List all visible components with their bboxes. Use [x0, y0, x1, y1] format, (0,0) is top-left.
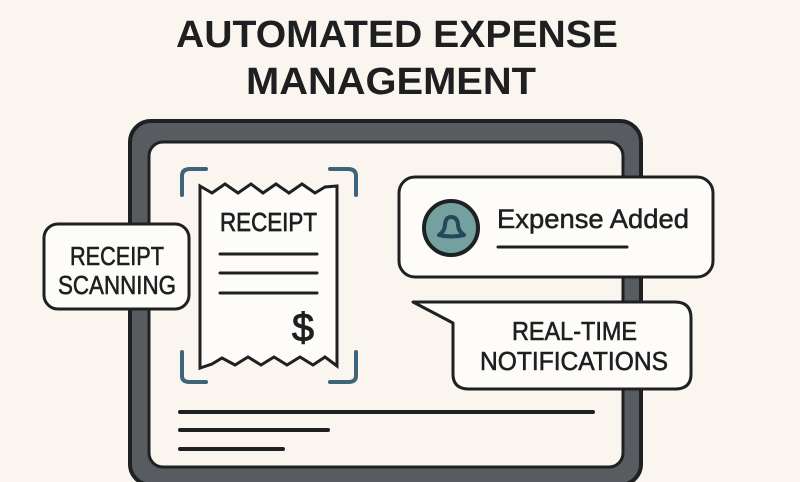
callout: receipt scanning: RECEIPT — [70, 241, 164, 271]
title: MANAGEMENT — [246, 61, 536, 103]
notification card: expense added: Expense Added — [497, 204, 689, 234]
icon: bell — [424, 201, 478, 255]
speech bubble: real-time notifications — [413, 302, 691, 389]
receipt — [200, 184, 337, 368]
text lines — [180, 412, 593, 449]
dollar sign: $ — [292, 306, 314, 350]
speech bubble: real-time notifications: NOTIFICATIONS — [480, 346, 668, 376]
callout: receipt scanning — [44, 224, 189, 309]
receipt heading: RECEIPT — [220, 207, 317, 237]
callout: receipt scanning: SCANNING — [58, 270, 176, 300]
speech bubble: real-time notifications: REAL-TIME — [512, 316, 637, 346]
title — [176, 14, 618, 103]
notification card: expense added — [399, 177, 713, 277]
tablet frame — [130, 121, 641, 482]
scan brackets — [182, 169, 356, 382]
title: AUTOMATED EXPENSE — [176, 14, 618, 56]
receipt lines — [220, 254, 317, 293]
